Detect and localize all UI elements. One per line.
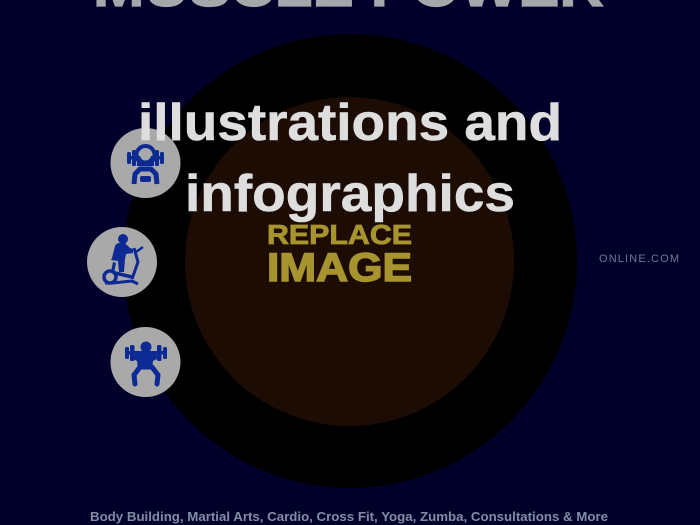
outer black circle (123, 34, 577, 488)
icon: chest press (110, 128, 180, 198)
placeholder text: replace image (267, 219, 412, 290)
overlay title: infographics (185, 165, 515, 223)
label: online.com: ONLINE.COM (599, 253, 679, 265)
placeholder text: replace image: IMAGE (267, 246, 412, 290)
overlay title: illustrations and (138, 94, 562, 152)
icon: squat with barbell (110, 327, 180, 397)
placeholder text: replace image: REPLACE (267, 219, 412, 250)
overlay title (138, 94, 562, 223)
footer services line: Body Building, Martial Arts, Cardio, Cross Fit, Yoga, Zumba, Consultations & More (90, 509, 608, 524)
icon: elliptical trainer (87, 227, 157, 297)
inner image placeholder circle (185, 97, 514, 426)
